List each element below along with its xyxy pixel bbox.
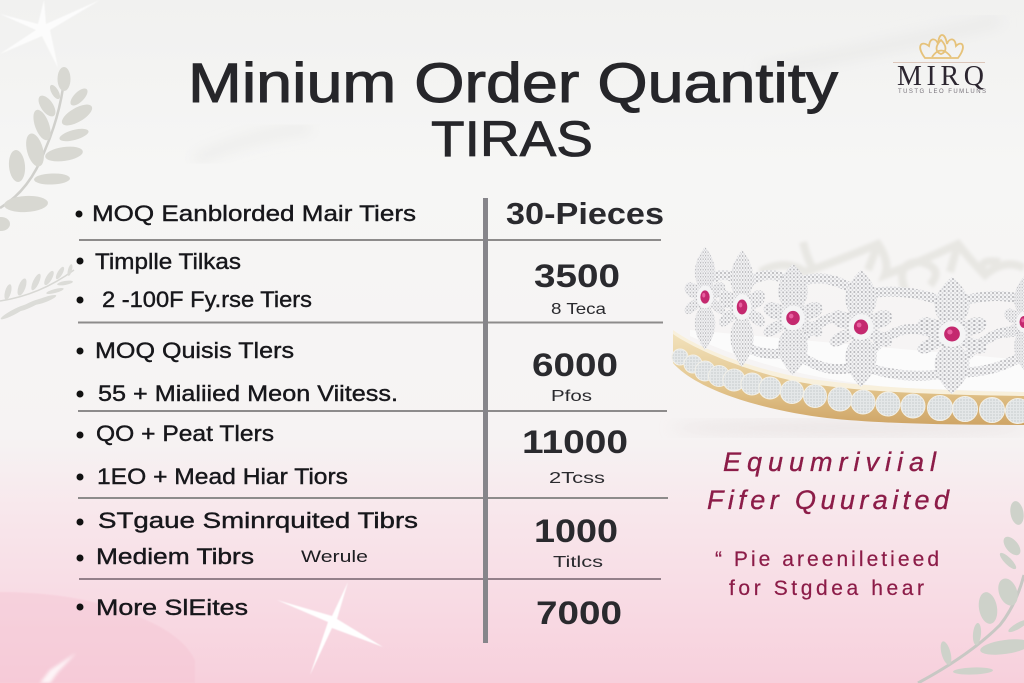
row 4: 2Tcss <box>549 470 605 487</box>
row 3: 55 + Mialiied Meon Viitess. <box>98 381 398 406</box>
row 4: 11000 <box>522 424 628 460</box>
row 4: 1EO + Mead Hiar Tiors <box>97 464 348 489</box>
title <box>188 51 838 167</box>
row 2: 2 -100F Fy.rse Tiers <box>102 287 312 312</box>
title: TIRAS <box>431 111 593 167</box>
tiara flowers <box>685 247 725 350</box>
callout: right text <box>707 447 950 600</box>
row 1: MOQ Eanblorded Mair Tiers <box>92 201 416 226</box>
leaf branch: upper left <box>0 67 95 231</box>
callout: right text: Equumriviial <box>723 447 937 477</box>
table dividers <box>78 240 668 579</box>
row 5: Titlcs <box>553 554 603 571</box>
row 1 <box>76 196 664 231</box>
row 5: 1000 <box>534 513 618 549</box>
row 6: 7000 <box>536 595 622 631</box>
sparkle: top left <box>0 0 100 68</box>
row 5: Mediem Tibrs <box>96 544 254 569</box>
row 3: Pfos <box>551 388 592 405</box>
table: tiers <box>76 196 668 643</box>
row 3: 6000 <box>532 347 618 383</box>
logo: MIRQ: TUSTG LEO FUMLUNS <box>898 89 986 95</box>
row 1: 30-Pieces <box>506 196 664 231</box>
logo: MIRQ <box>893 35 986 95</box>
row 5: Werule <box>301 547 368 566</box>
callout: right text: Fifer Quuraited <box>707 485 950 515</box>
sparkle: bottom left <box>40 653 76 683</box>
row 3: MOQ Quisis Tlers <box>95 338 294 363</box>
row 3 <box>76 338 618 406</box>
tiara lattice chain <box>705 275 1024 376</box>
row 4 <box>76 421 628 489</box>
row 6: More SlEites <box>96 595 248 620</box>
title: Minium Order Quantity <box>188 51 838 114</box>
row 2: 3500 <box>534 258 620 294</box>
row 2: 8 Teca <box>551 301 606 318</box>
row 4: QO + Peat Tlers <box>96 421 274 446</box>
tiara back, blurred <box>760 242 1024 290</box>
row 5: STgaue Sminrquited Tibrs <box>98 508 418 533</box>
tiara gold band <box>673 333 1024 425</box>
icon: gold crown <box>920 35 963 58</box>
leaf branch: lower right <box>918 500 1024 683</box>
tiara shadow <box>670 420 1024 436</box>
row 2: Timplle Tilkas <box>95 249 241 274</box>
callout: right text: for Stɡdea hear <box>729 577 924 600</box>
callout: right text: “ Pie areeniletieed <box>715 548 939 571</box>
tiara photo <box>670 242 1024 436</box>
row 5 <box>76 508 618 571</box>
tiara inner white <box>690 330 1024 392</box>
row 2 <box>76 249 620 318</box>
sparkle: bottom centre <box>277 582 383 675</box>
row 6 <box>76 595 622 631</box>
leaf branch: lower left <box>0 264 74 321</box>
table vertical rule <box>483 198 488 643</box>
logo: MIRQ: MIRQ <box>897 61 984 92</box>
tiara band stones <box>672 349 1024 424</box>
